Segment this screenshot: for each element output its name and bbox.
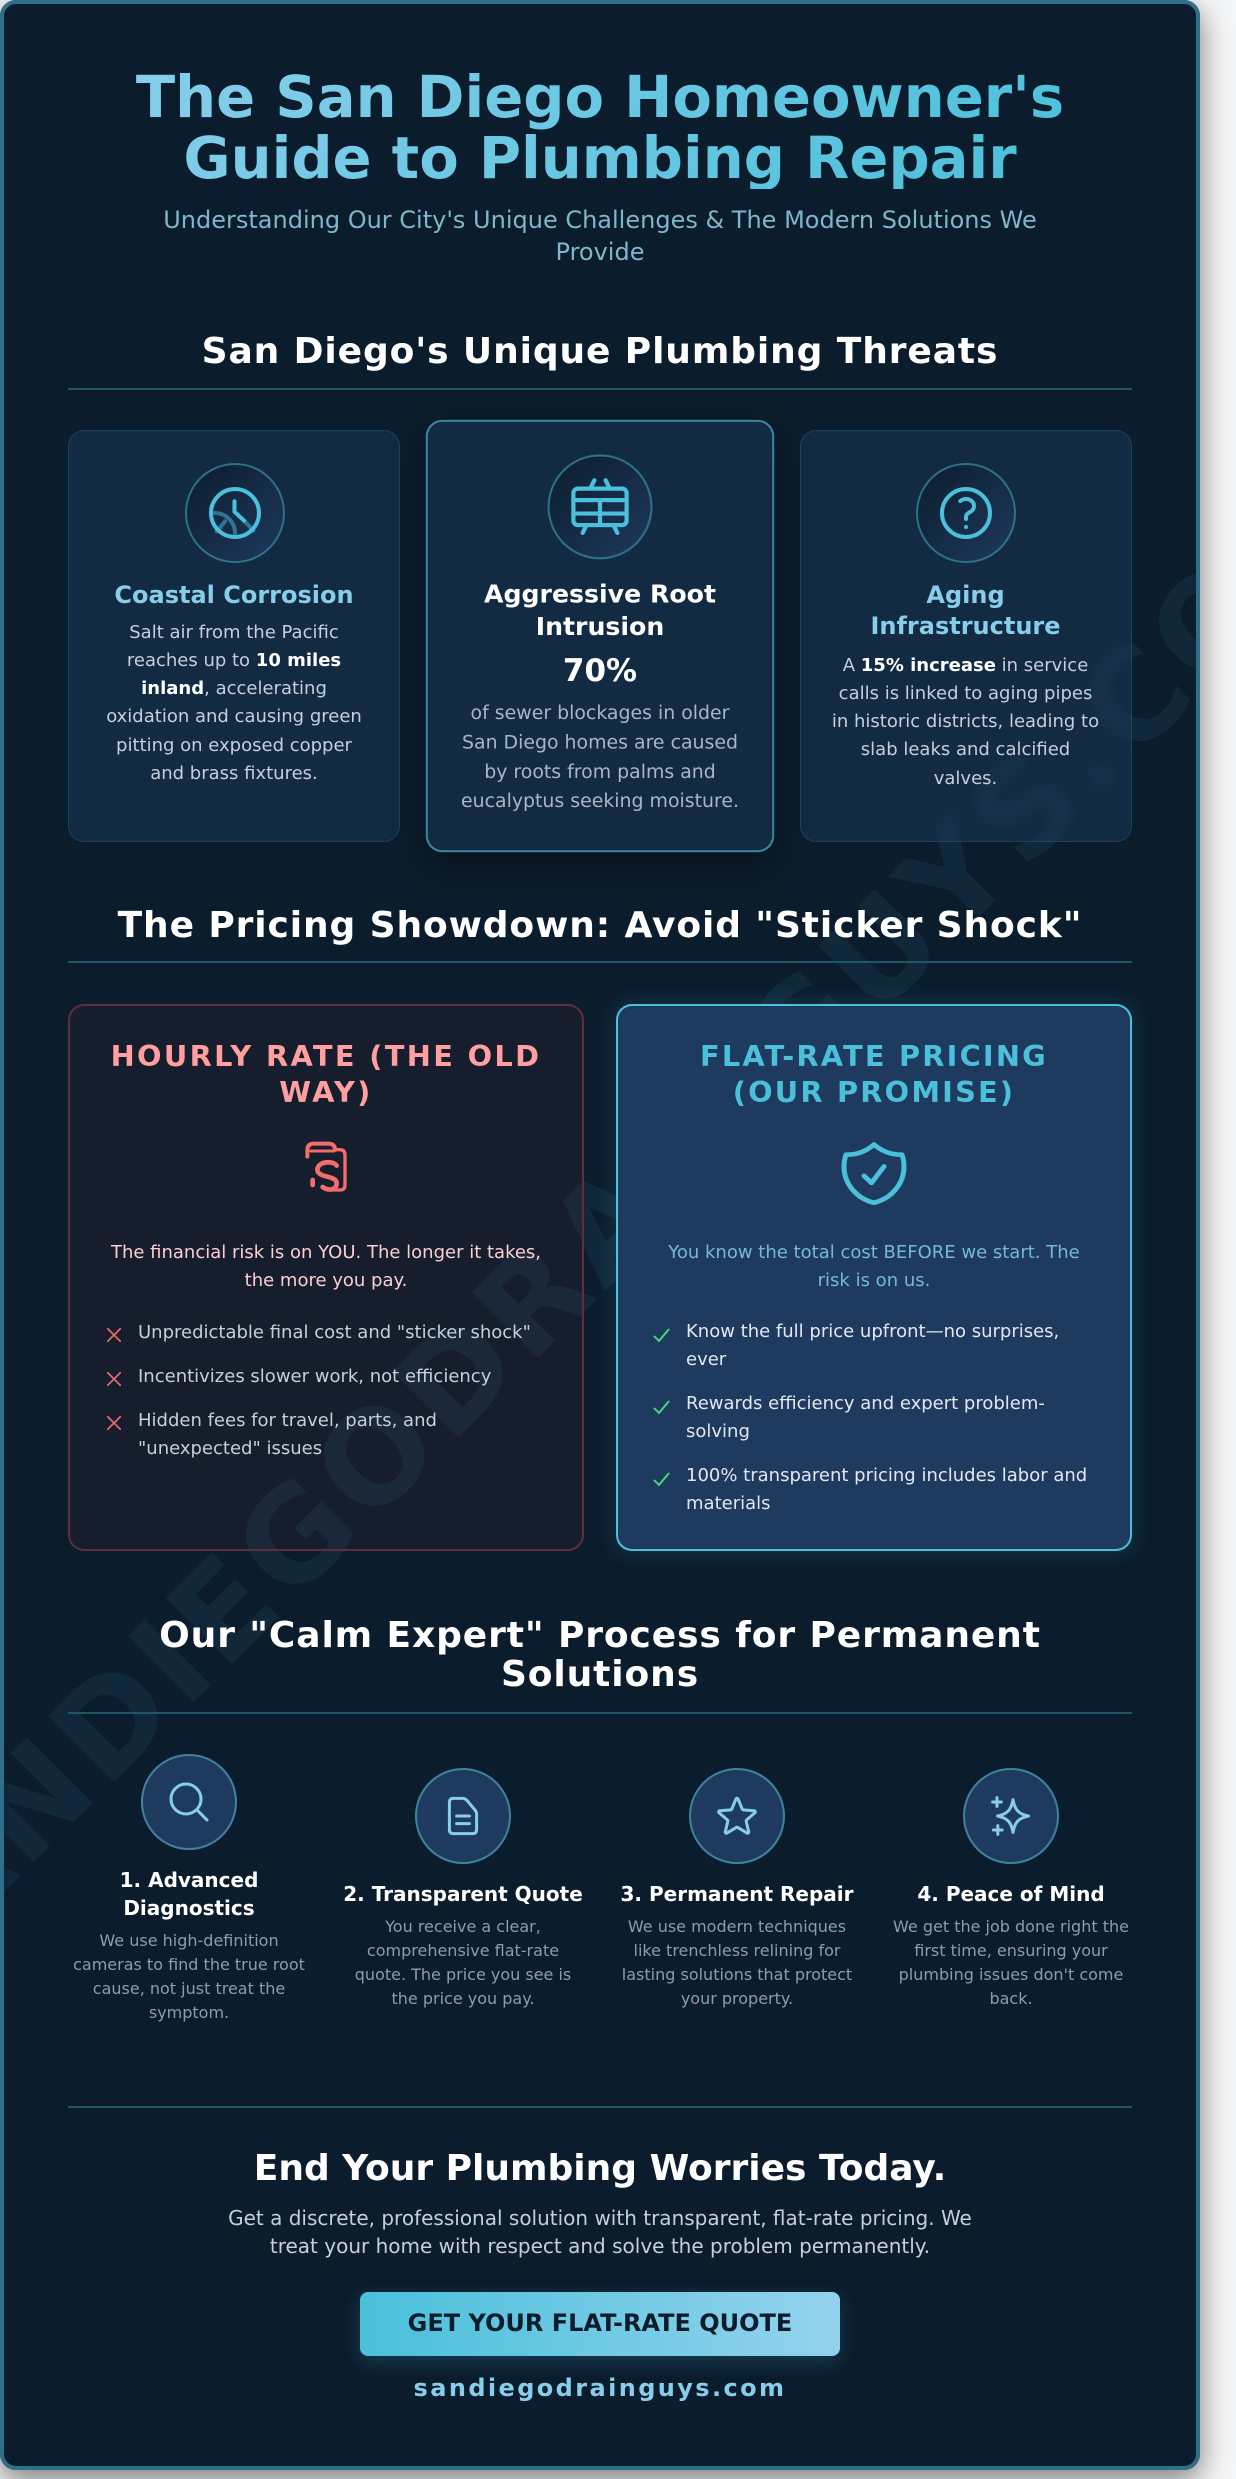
step 1 xyxy=(73,1754,305,2022)
card text: by roots from palms and xyxy=(484,761,716,783)
check mark xyxy=(653,1400,670,1414)
item: 100% transparent pricing includes labor and xyxy=(686,1465,1087,1486)
icon: magnifying glass xyxy=(141,1754,237,1850)
icon: root grid xyxy=(548,454,652,559)
heading: process: Solutions xyxy=(501,1654,699,1695)
step 4 xyxy=(893,1768,1129,2008)
title: Guide to Plumbing Repair xyxy=(183,124,1017,192)
icon: question mark xyxy=(916,463,1016,563)
heading: process: Our "Calm Expert" Process for Permanent xyxy=(159,1615,1041,1656)
step title: 4. Peace of Mind xyxy=(917,1882,1105,1906)
panel title: (OUR PROMISE) xyxy=(733,1075,1015,1109)
step text: We use modern techniques xyxy=(628,1917,846,1936)
icon: sparkles xyxy=(963,1768,1059,1864)
panel summary: risk is on us. xyxy=(818,1270,930,1291)
button: GET YOUR FLAT-RATE QUOTE xyxy=(408,2309,792,2337)
card text: valves. xyxy=(934,768,997,789)
item: Hidden fees for travel, parts, and xyxy=(138,1410,437,1430)
list: benefits xyxy=(653,1321,1087,1514)
item: Rewards efficiency and expert problem- xyxy=(686,1393,1045,1414)
step text: first time, ensuring your xyxy=(914,1941,1108,1960)
step title: Diagnostics xyxy=(123,1896,255,1920)
card title: Coastal Corrosion xyxy=(114,580,354,608)
step title: 2. Transparent Quote xyxy=(343,1882,583,1906)
card title xyxy=(484,579,716,642)
panel: flat-rate pricing xyxy=(616,1004,1132,1551)
check mark xyxy=(653,1328,670,1342)
panel summary: the more you pay. xyxy=(245,1270,407,1291)
card text: pitting on exposed copper xyxy=(116,735,352,756)
item: ever xyxy=(686,1349,726,1370)
item: materials xyxy=(686,1493,771,1514)
step text: symptom. xyxy=(149,2003,229,2022)
panel title: FLAT-RATE PRICING xyxy=(700,1039,1048,1073)
icon: clock with corrosion xyxy=(185,463,285,563)
step 3 xyxy=(621,1768,854,2008)
panel summary: You know the total cost BEFORE we start. The xyxy=(668,1242,1080,1262)
heading: process xyxy=(159,1615,1041,1695)
item xyxy=(686,1393,1045,1442)
panel title xyxy=(111,1039,541,1109)
step text xyxy=(355,1917,571,2008)
x mark xyxy=(107,1328,121,1342)
card text: of sewer blockages in older xyxy=(471,702,729,724)
step text: We get the job done right the xyxy=(893,1917,1129,1936)
website: sandiegodrainguys.com xyxy=(414,2374,786,2402)
panel: aggressive root intrusion xyxy=(426,420,774,852)
panel title xyxy=(700,1039,1048,1109)
card text: Salt air from the Pacific xyxy=(129,622,339,643)
item: Know the full price upfront—no surprises, xyxy=(686,1321,1059,1342)
card text: and brass fixtures. xyxy=(150,763,318,784)
heading: pricing: The Pricing Showdown: Avoid "Sticker Shock" xyxy=(118,904,1082,946)
check mark xyxy=(653,1472,670,1486)
icon: document xyxy=(415,1768,511,1864)
card title: Aggressive Root xyxy=(484,579,716,609)
step text: You receive a clear, xyxy=(385,1917,541,1936)
icon: star xyxy=(689,1768,785,1864)
subtitle: Provide xyxy=(556,238,644,266)
heading: threats: San Diego's Unique Plumbing Threats xyxy=(202,331,998,372)
step text xyxy=(893,1917,1129,2008)
card title xyxy=(870,580,1061,640)
panel title: WAY) xyxy=(279,1075,373,1109)
step text: plumbing issues don't come xyxy=(899,1965,1123,1984)
item: Unpredictable final cost and "sticker shock" xyxy=(138,1322,531,1342)
step text: comprehensive flat-rate xyxy=(367,1941,559,1960)
step text: the price you pay. xyxy=(392,1989,534,2008)
panel summary xyxy=(668,1242,1080,1291)
step title: 3. Permanent Repair xyxy=(621,1882,853,1906)
subtitle: Understanding Our City's Unique Challenges & The Modern Solutions We xyxy=(163,206,1037,234)
panel: aging infrastructure xyxy=(800,430,1132,842)
card text: San Diego homes are caused xyxy=(462,732,738,754)
card text: oxidation and causing green xyxy=(106,706,362,727)
x mark xyxy=(107,1416,121,1430)
step text: cause, not just treat the xyxy=(93,1979,285,1998)
item xyxy=(686,1321,1059,1370)
icon: shield check xyxy=(842,1142,906,1206)
call to action text: treat your home with respect and solve the problem permanently. xyxy=(270,2234,930,2258)
step text: quote. The price you see is xyxy=(355,1965,571,1984)
card text: slab leaks and calcified xyxy=(861,739,1070,760)
card text: inland, accelerating xyxy=(141,678,327,699)
panel summary xyxy=(110,1242,541,1291)
card text: in historic districts, leading to xyxy=(832,711,1099,732)
button xyxy=(360,2292,840,2356)
x mark xyxy=(107,1372,121,1386)
panel title: HOURLY RATE (THE OLD xyxy=(111,1039,541,1073)
card text xyxy=(106,622,362,784)
panel summary: The financial risk is on YOU. The longer it takes, xyxy=(111,1242,541,1262)
card text: calls is linked to aging pipes xyxy=(839,683,1092,704)
panel: hourly rate xyxy=(68,1004,584,1551)
step title xyxy=(120,1868,258,1920)
step text xyxy=(622,1917,852,2008)
item xyxy=(138,1410,437,1459)
step text: We use high-definition xyxy=(99,1931,279,1950)
heading: call to action: End Your Plumbing Worries Today. xyxy=(254,2148,946,2188)
title xyxy=(136,64,1064,192)
step text: your property. xyxy=(681,1989,793,2008)
list: drawbacks xyxy=(107,1322,531,1459)
subtitle xyxy=(163,206,1037,266)
title: The San Diego Homeowner's xyxy=(136,64,1064,131)
stat: 70%: 70% xyxy=(563,653,637,688)
item: solving xyxy=(686,1421,750,1442)
card title: Aging xyxy=(926,580,1005,608)
step text xyxy=(73,1931,305,2022)
item: Incentivizes slower work, not efficiency xyxy=(138,1366,491,1386)
card text: A 15% increase in service xyxy=(843,655,1088,676)
card text xyxy=(461,702,739,813)
card title: Infrastructure xyxy=(870,612,1061,640)
card title: Intrusion xyxy=(536,612,664,642)
step text: lasting solutions that protect xyxy=(622,1965,852,1984)
item xyxy=(686,1465,1087,1514)
step title: 1. Advanced xyxy=(120,1868,258,1892)
card text: eucalyptus seeking moisture. xyxy=(461,791,739,813)
card text xyxy=(832,655,1099,789)
card text: reaches up to 10 miles xyxy=(127,650,341,671)
call to action text xyxy=(228,2206,972,2258)
panel: coastal corrosion xyxy=(68,430,400,842)
call to action text: Get a discrete, professional solution with transparent, flat-rate pricing. We xyxy=(228,2206,972,2230)
step text: like trenchless relining for xyxy=(634,1941,840,1960)
item: "unexpected" issues xyxy=(138,1438,322,1459)
step text: back. xyxy=(989,1989,1033,2008)
step text: cameras to find the true root xyxy=(73,1955,305,1974)
step 2 xyxy=(343,1768,583,2008)
icon: money document xyxy=(305,1142,347,1192)
